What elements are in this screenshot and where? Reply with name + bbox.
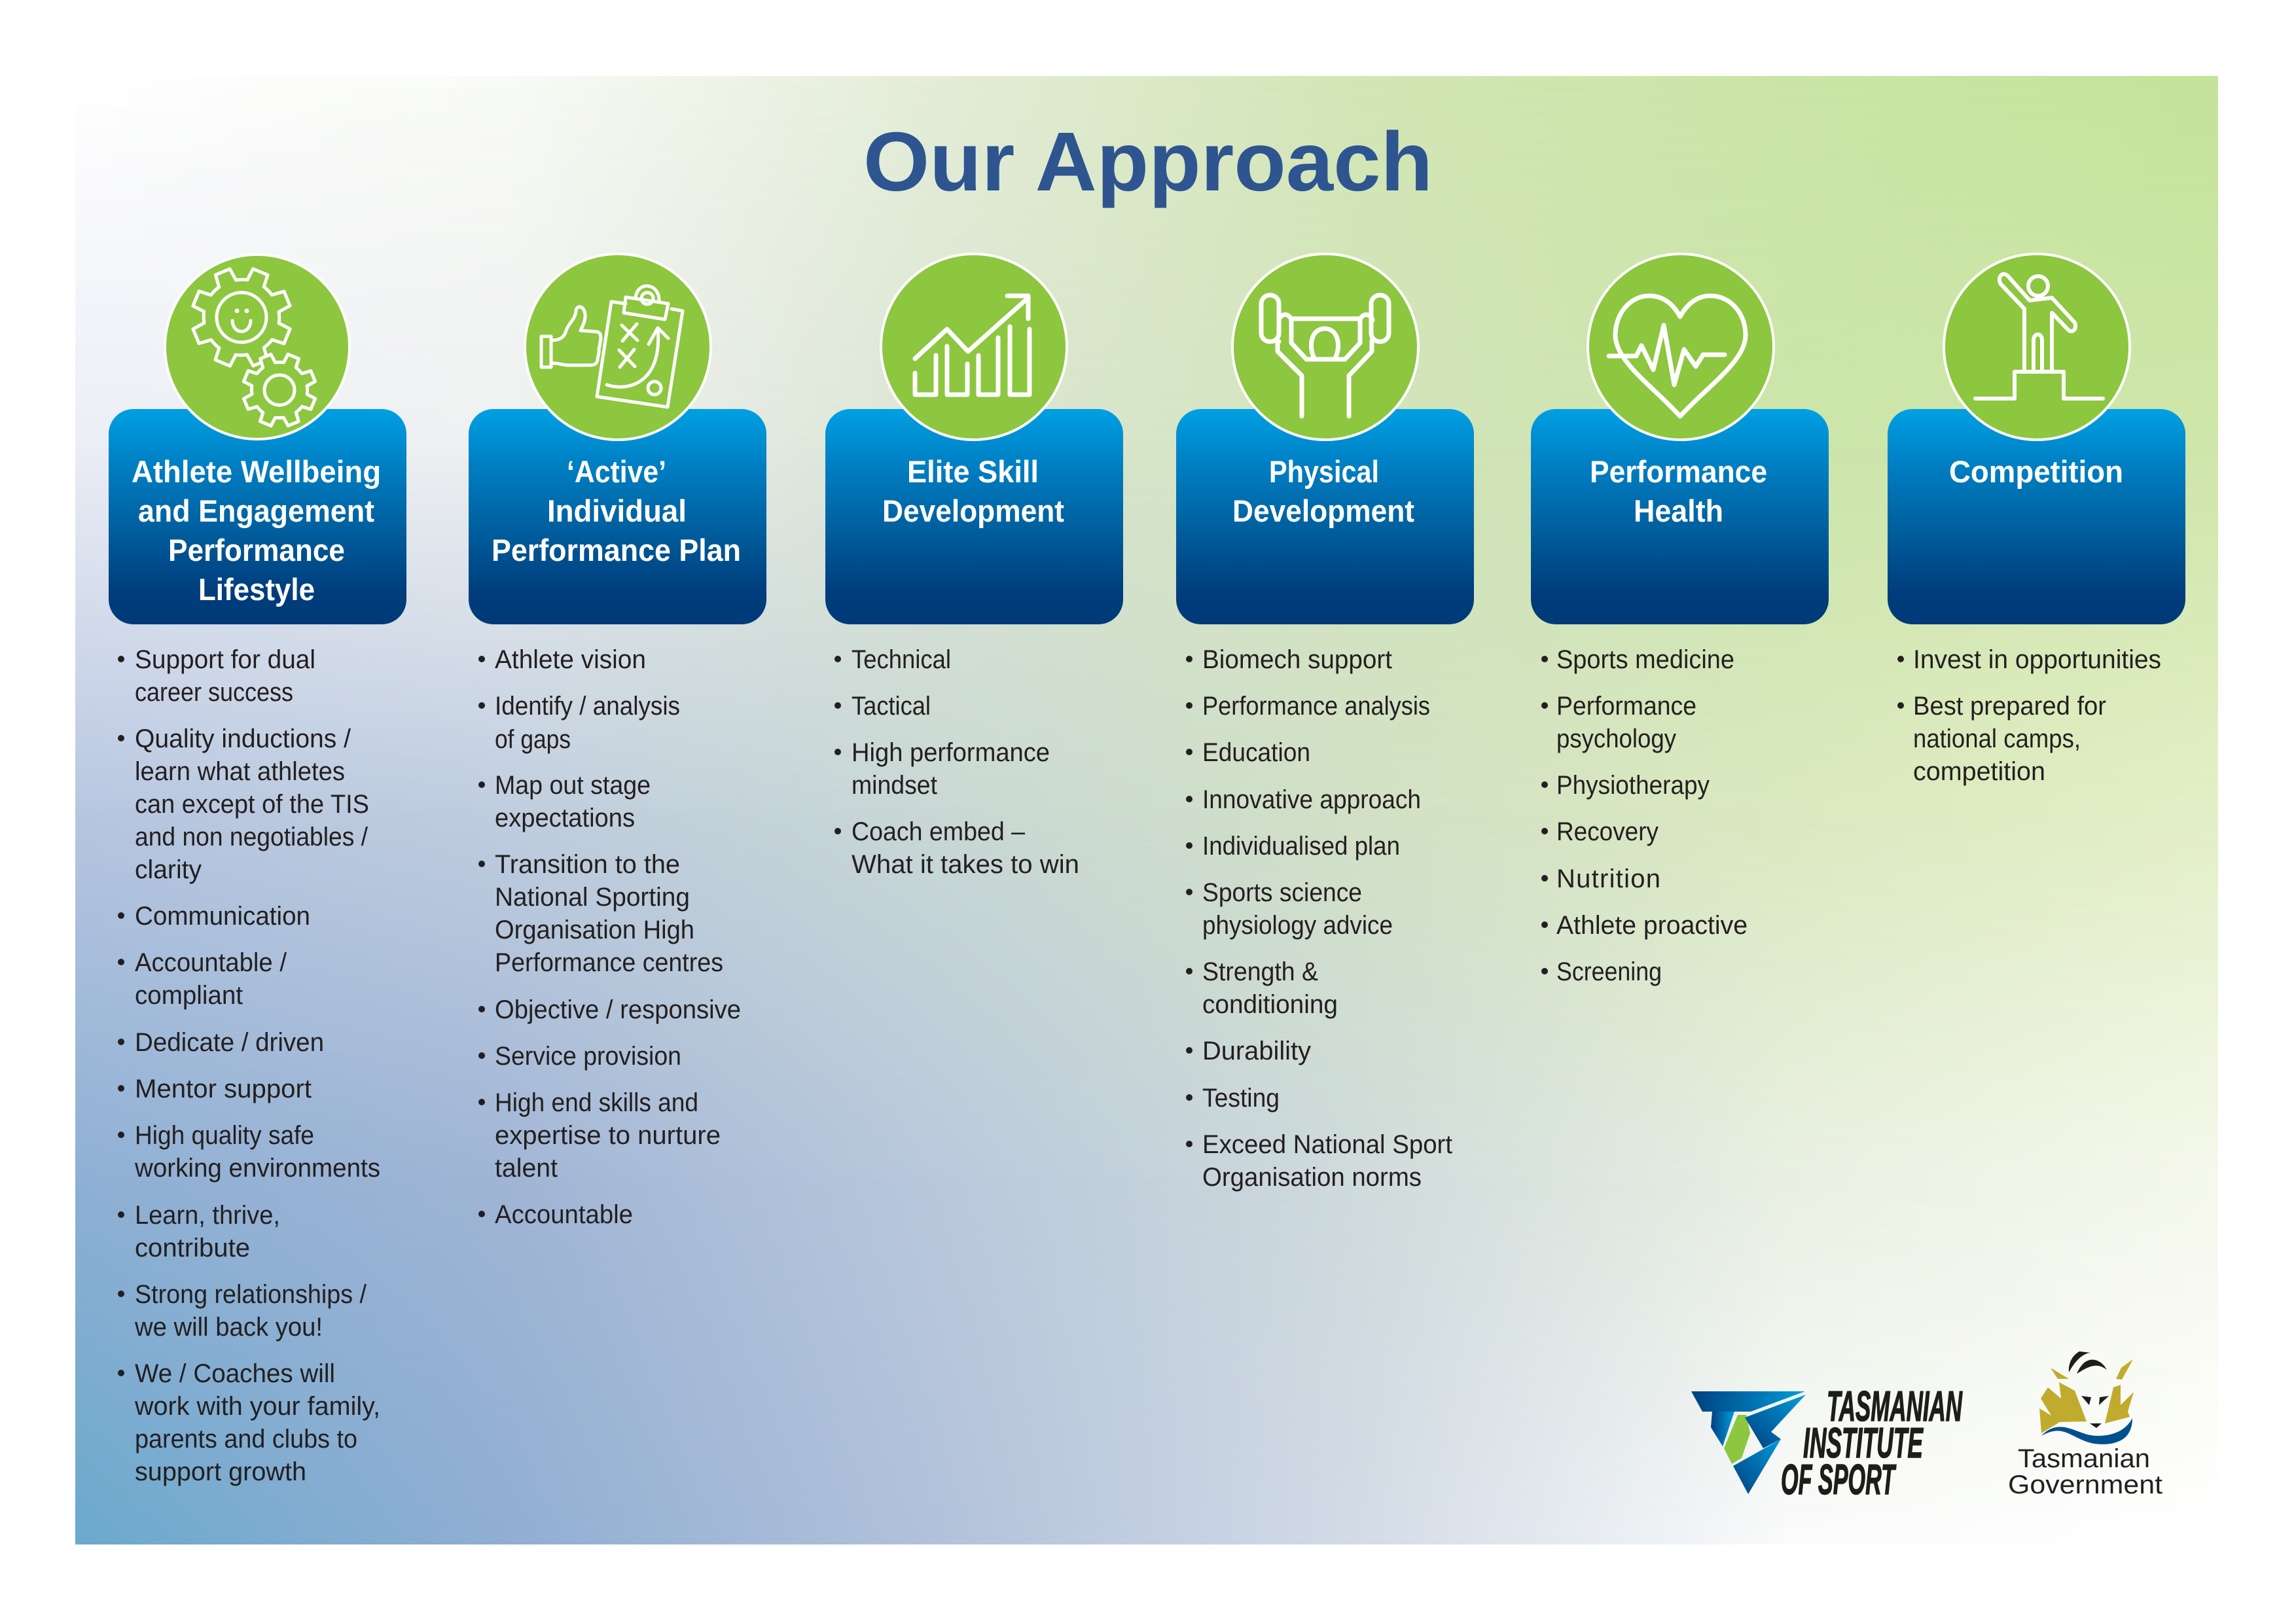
- bullet list: expertise to nurture: [495, 1121, 721, 1150]
- heading: Performance: [168, 533, 345, 567]
- header box: [1888, 409, 2185, 624]
- bullet list: Testing: [1202, 1084, 1280, 1113]
- icon: weightlifter: [1232, 254, 1418, 440]
- bullet list: [478, 645, 741, 1229]
- bullet list: Organisation norms: [1202, 1163, 1422, 1192]
- heading: [132, 454, 381, 607]
- header box: [109, 409, 406, 624]
- bullet list: we will back you!: [134, 1313, 323, 1342]
- logo: Tasmanian Institute of Sport: OF SPORT: [1781, 1455, 1897, 1503]
- heading: Development: [882, 493, 1064, 528]
- bullet list: competition: [1913, 757, 2045, 786]
- icon: athlete on podium: [1944, 254, 2130, 440]
- bullet list: expectations: [495, 804, 635, 832]
- bullet list: Coach embed –: [852, 817, 1026, 846]
- bullet list: learn what athletes: [135, 757, 345, 786]
- bullet list: Screening: [1556, 957, 1662, 986]
- logo: Tasmanian Institute of Sport: INSTITUTE: [1803, 1419, 1924, 1467]
- bullet list: and non negotiables /: [135, 823, 368, 851]
- heading: [1232, 454, 1414, 528]
- bullet list: Dedicate / driven: [135, 1028, 324, 1057]
- bullet list: Education: [1202, 738, 1310, 767]
- header box: [1176, 409, 1474, 624]
- icon: thumbs up and clipboard: [525, 254, 711, 440]
- bullet list: Recovery: [1556, 817, 1659, 846]
- bullet list: national camps,: [1913, 724, 2081, 753]
- panel: Competition column: [1888, 254, 2185, 786]
- heading: Performance Plan: [492, 533, 741, 567]
- bullet list: Strong relationships /: [135, 1280, 367, 1309]
- bullet list: What it takes to win: [852, 850, 1079, 879]
- bullet list: Communication: [135, 902, 310, 931]
- bullet list: of gaps: [495, 725, 571, 754]
- bullet list: talent: [495, 1154, 558, 1183]
- bullet list: Performance centres: [495, 948, 723, 977]
- bullet list: mindset: [852, 771, 937, 800]
- heading: Lifestyle: [198, 572, 315, 607]
- bullet list: [118, 645, 380, 1486]
- panel: Active Individual Performance Plan column: [469, 254, 766, 1229]
- header box: [1531, 409, 1829, 624]
- bullet list: Objective / responsive: [495, 995, 741, 1024]
- bullet list: High end skills and: [495, 1088, 698, 1117]
- bullet list: Durability: [1202, 1037, 1311, 1065]
- heading: Development: [1232, 493, 1414, 528]
- bullet list: Performance: [1556, 692, 1696, 721]
- bullet list: National Sporting: [495, 883, 690, 912]
- panel: Athlete Wellbeing column: [109, 253, 406, 1486]
- icon: rising bar chart: [881, 254, 1067, 440]
- bullet list: Athlete proactive: [1556, 911, 1748, 940]
- bullet list: Innovative approach: [1202, 785, 1421, 814]
- bullet list: [1541, 645, 1748, 986]
- logo: Tasmanian Government: Government: [2008, 1471, 2162, 1499]
- bullet list: Support for dual: [135, 645, 315, 674]
- heading: Elite Skill: [907, 454, 1039, 489]
- logo: Tasmanian Institute of Sport: TASMANIAN: [1827, 1382, 1963, 1430]
- bullet list: Quality inductions /: [135, 724, 351, 753]
- heading: Performance: [1590, 454, 1767, 489]
- logo: Tasmanian Institute of Sport: [1691, 1382, 1963, 1503]
- bullet list: Transition to the: [495, 850, 680, 879]
- bullet list: Physiotherapy: [1556, 771, 1710, 800]
- bullet list: parents and clubs to: [135, 1425, 357, 1454]
- bullet list: High performance: [852, 738, 1050, 767]
- bullet list: Accountable /: [135, 948, 287, 977]
- heading: Athlete Wellbeing: [132, 454, 381, 489]
- bullet list: Tactical: [852, 692, 931, 721]
- bullet list: Strength &: [1202, 957, 1318, 986]
- bullet list: Identify / analysis: [495, 692, 680, 721]
- heading: Competition: [1949, 454, 2123, 489]
- bullet list: Accountable: [495, 1200, 633, 1229]
- bullet list: [1897, 645, 2161, 786]
- bullet list: Map out stage: [495, 771, 651, 800]
- bullet list: Technical: [852, 645, 951, 674]
- icon: gears with smile: [165, 253, 350, 439]
- bullet list: can except of the TIS: [135, 790, 369, 819]
- heading: [492, 454, 741, 567]
- bullet list: High quality safe: [135, 1121, 314, 1150]
- heading: and Engagement: [138, 493, 374, 528]
- heading: [1590, 454, 1767, 528]
- bullet list: work with your family,: [134, 1392, 380, 1421]
- panel: Physical Development column: [1176, 254, 1474, 1192]
- heading: [882, 454, 1064, 528]
- bullet list: Sports medicine: [1556, 645, 1734, 674]
- icon: heart with pulse: [1588, 254, 1774, 440]
- panel: Elite Skill Development column: [825, 254, 1123, 879]
- header box: [469, 409, 766, 624]
- bullet list: We / Coaches will: [135, 1359, 335, 1388]
- bullet list: Learn, thrive,: [135, 1201, 280, 1230]
- bullet list: Sports science: [1202, 878, 1362, 907]
- bullet list: physiology advice: [1202, 911, 1393, 940]
- heading: Individual: [547, 493, 687, 528]
- panel: Performance Health column: [1531, 254, 1829, 986]
- bullet list: Performance analysis: [1202, 692, 1430, 721]
- bullet list: Service provision: [495, 1042, 681, 1071]
- bullet list: Biomech support: [1202, 645, 1392, 674]
- bullet list: Best prepared for: [1913, 692, 2106, 721]
- bullet list: contribute: [135, 1234, 250, 1262]
- bullet list: compliant: [135, 981, 243, 1010]
- bullet list: Exceed National Sport: [1202, 1130, 1452, 1159]
- bullet list: Mentor support: [135, 1075, 312, 1103]
- bullet list: Invest in opportunities: [1913, 645, 2161, 674]
- bullet list: [834, 645, 1079, 879]
- bullet list: [1186, 645, 1452, 1192]
- heading: Health: [1634, 493, 1723, 528]
- bullet list: Organisation High: [495, 916, 694, 944]
- heading: ‘Active’: [567, 454, 666, 489]
- bullet list: career success: [135, 678, 293, 707]
- heading: Physical: [1269, 454, 1379, 489]
- header box: [825, 409, 1123, 624]
- bullet list: conditioning: [1202, 990, 1338, 1019]
- bullet list: psychology: [1556, 724, 1676, 753]
- bullet list: Athlete vision: [495, 645, 646, 674]
- bullet list: Nutrition: [1556, 865, 1660, 893]
- bullet list: clarity: [135, 855, 202, 884]
- logo: Tasmanian Government: [2008, 1351, 2162, 1499]
- logo: Tasmanian Government: Tasmanian: [2018, 1444, 2150, 1473]
- bullet list: Individualised plan: [1202, 832, 1400, 861]
- title: Our Approach: [863, 115, 1433, 209]
- bullet list: working environments: [134, 1154, 380, 1183]
- bullet list: support growth: [135, 1457, 306, 1486]
